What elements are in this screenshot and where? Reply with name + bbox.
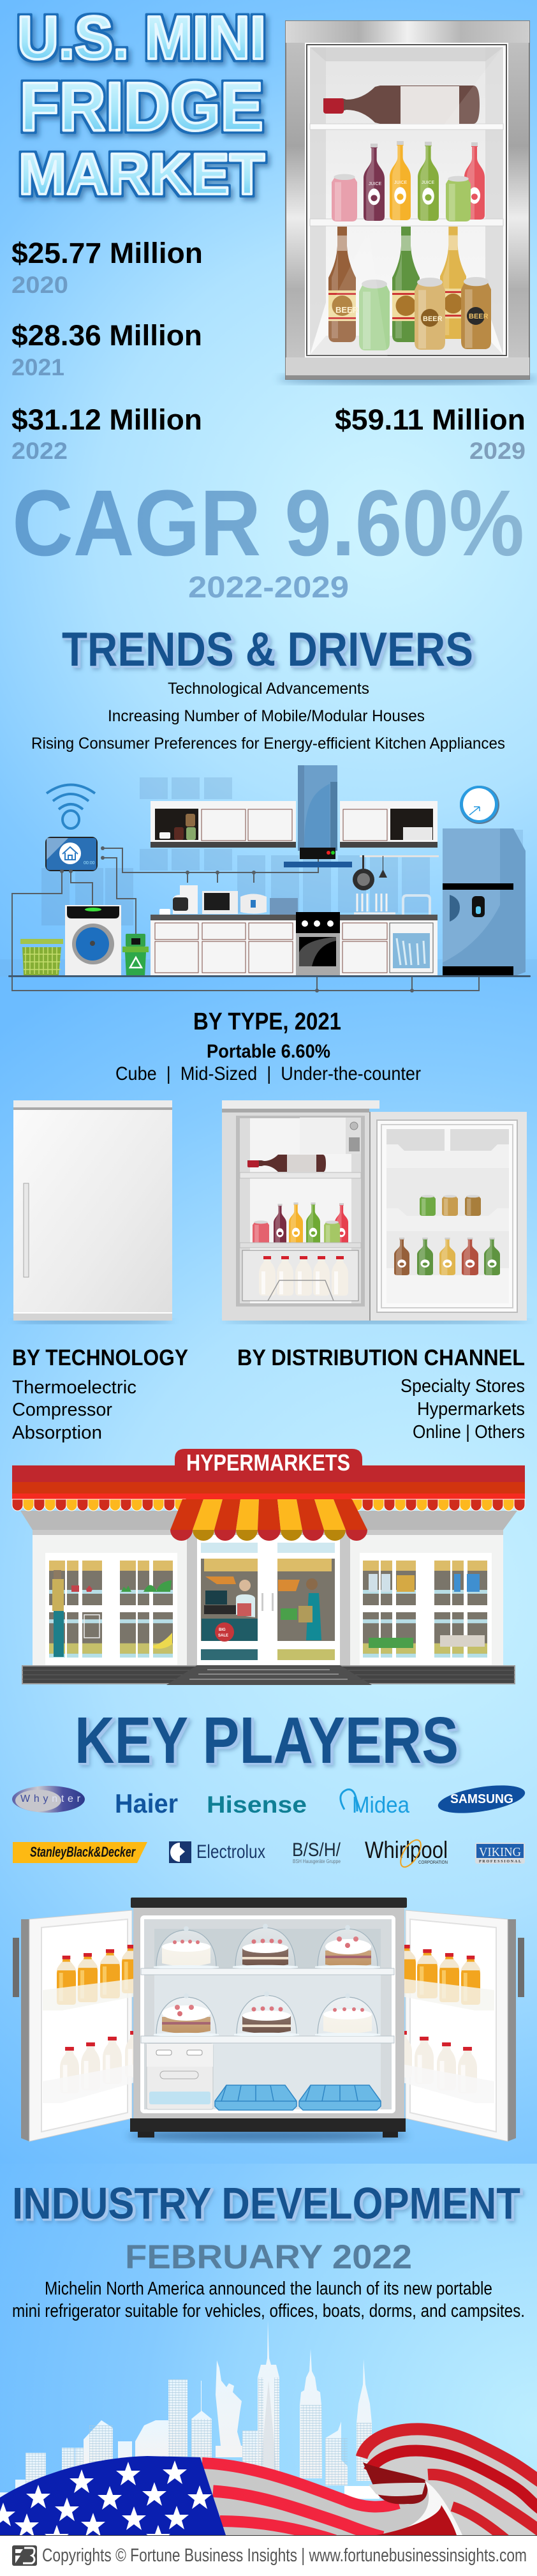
icon: smart home hub — [45, 837, 98, 871]
logo: Electrolux: Electrolux — [196, 1841, 265, 1862]
cashier counter: SALE — [218, 1634, 228, 1638]
oven — [296, 912, 340, 977]
by distribution channel: Online | Others — [413, 1422, 525, 1442]
awning and sign — [12, 1449, 525, 1541]
upper cabinets right — [340, 801, 438, 848]
icon: smart home hub: 00:00 — [84, 861, 95, 865]
wine bottle — [323, 86, 480, 124]
chrysler building — [357, 2359, 372, 2481]
logo: Electrolux — [169, 1841, 265, 1863]
floor — [8, 975, 531, 977]
by distribution channel — [237, 1345, 525, 1442]
market value 2020: $25.77 Million — [11, 237, 203, 269]
wine bottle — [247, 1155, 326, 1172]
awning scallops — [12, 1499, 525, 1511]
ice trays — [215, 2085, 381, 2110]
market value 2029 — [335, 403, 526, 464]
door handle — [24, 1183, 29, 1277]
development text — [12, 2279, 525, 2321]
left door — [13, 1910, 145, 2141]
title: FRIDGE — [20, 68, 263, 145]
recycling bin — [122, 934, 149, 977]
market value 2021: $28.36 Million — [11, 319, 202, 352]
title: MARKET — [18, 142, 265, 207]
by distribution channel: Hypermarkets — [417, 1399, 525, 1419]
blue refrigerator — [443, 828, 526, 977]
store base and steps — [22, 1665, 515, 1685]
beer bottles and cans: BEER — [335, 305, 359, 315]
market value 2020 — [11, 237, 203, 298]
title: U.S. MINI — [17, 4, 266, 72]
by technology: Absorption — [12, 1423, 102, 1443]
trends list: Rising Consumer Preferences for Energy-efficient Kitchen Appliances — [31, 735, 505, 753]
upper cabinets left — [151, 801, 296, 848]
lower cabinets — [151, 915, 438, 977]
logo: Fortune Business Insights — [12, 2545, 37, 2566]
logo: Whirlpool — [365, 1837, 448, 1870]
logo: BSH: BSH Hausgeräte Gruppe — [293, 1859, 341, 1864]
by technology: Compressor — [12, 1400, 112, 1420]
by distribution channel: Specialty Stores — [401, 1376, 525, 1397]
right door — [392, 1910, 524, 2141]
store wall — [20, 1511, 517, 1665]
entrance doors — [187, 1535, 350, 1665]
logo: Viking: PROFESSIONAL — [479, 1860, 521, 1864]
juice bottles and cans: JUICE — [369, 182, 382, 186]
market value 2022: 2022 — [11, 438, 68, 464]
cashier counter — [202, 1580, 258, 1642]
by type heading: BY TYPE, 2021 — [193, 1008, 341, 1035]
logo: Whirlpool: Whirlpool — [365, 1837, 448, 1863]
illustration: American flag — [0, 2424, 537, 2549]
footer — [0, 2535, 537, 2576]
key player logos — [12, 1780, 527, 1870]
cooker hood — [284, 765, 352, 867]
drinks on middle shelf — [253, 1202, 348, 1247]
by technology — [12, 1345, 188, 1443]
open door — [369, 1112, 527, 1321]
juice bottles and cans — [332, 141, 485, 221]
washing machine — [65, 905, 121, 977]
beer bottles and cans — [328, 227, 491, 350]
logo: BSH: B/S/H/ — [292, 1839, 341, 1861]
back ribbon — [358, 2424, 537, 2540]
door cans — [420, 1195, 481, 1216]
market value 2029: 2029 — [469, 438, 526, 464]
illustration: smart kitchen — [0, 765, 537, 992]
fridge cabinet — [130, 1898, 407, 2138]
heading: key players: KEY PLAYERS — [75, 1704, 459, 1777]
logo: Samsung — [436, 1780, 527, 1818]
juice bottles and cans: JUICE — [422, 181, 435, 185]
market value 2021: 2021 — [11, 354, 64, 380]
logo: Stanley Black & Decker: StanleyBlack&Decker — [30, 1844, 136, 1860]
by technology: Thermoelectric — [12, 1377, 136, 1398]
logo: Viking — [475, 1843, 525, 1864]
cakes under domes — [152, 1924, 382, 2037]
counter appliances — [159, 885, 430, 917]
illustration: closed fridge — [13, 1100, 173, 1324]
logo: Samsung: SAMSUNG — [450, 1792, 513, 1806]
pans on rail — [353, 855, 439, 890]
leading segment: Portable 6.60% — [207, 1041, 330, 1062]
logo: Haier: Haier — [115, 1788, 178, 1818]
skyline window detail — [26, 2378, 372, 2497]
illustration: open double door fridge with cakes — [13, 1898, 524, 2142]
heading: trends and drivers: TRENDS & DRIVERS — [62, 622, 473, 676]
empire state building — [300, 2349, 322, 2478]
ice drawer — [147, 2044, 213, 2109]
logo: Whynter: Why nter — [20, 1793, 81, 1804]
illustration: hypermarket store — [12, 1449, 525, 1685]
juice bottles and cans: JUICE — [394, 181, 408, 185]
flag canton — [0, 2456, 226, 2535]
trends list: Technological Advancements — [168, 680, 369, 698]
central awning — [170, 1499, 367, 1541]
market value 2029: $59.11 Million — [335, 403, 526, 436]
title — [17, 4, 266, 207]
logo: Midea: Midea — [352, 1792, 410, 1818]
logo: Whirlpool: CORPORATION — [418, 1861, 448, 1865]
logo: Stanley Black & Decker — [13, 1842, 147, 1863]
by technology: BY TECHNOLOGY — [12, 1345, 188, 1370]
shopper — [281, 1578, 321, 1640]
fold of the flag — [363, 2462, 427, 2504]
freezer compartment — [300, 1118, 361, 1154]
market value 2021 — [11, 319, 202, 380]
market value 2022 — [11, 403, 202, 464]
right window — [360, 1553, 492, 1665]
front ribbon — [200, 2457, 462, 2540]
logo: Viking: VIKING — [479, 1845, 521, 1859]
beer bottles and cans: BEER — [469, 313, 489, 320]
dishwasher — [390, 923, 433, 973]
circuit wires — [12, 846, 481, 992]
market value 2020: 2020 — [11, 272, 68, 298]
logo: Whynter — [12, 1786, 85, 1813]
illustration: glass door mini fridge with drinks — [277, 21, 537, 384]
laundry basket — [20, 939, 63, 977]
store sign text: HYPERMARKETS — [186, 1449, 350, 1476]
beer bottles and cans: BEER — [423, 315, 443, 323]
cashier counter: BIG — [219, 1628, 226, 1632]
development date: FEBRUARY 2022 — [125, 2238, 412, 2276]
market value 2022: $31.12 Million — [11, 403, 202, 436]
statue of liberty — [216, 2360, 247, 2457]
trends list — [31, 680, 505, 753]
illustration: open fridge — [222, 1100, 529, 1324]
door bottles — [394, 1238, 500, 1275]
type segments: Cube | Mid-Sized | Under-the-counter — [115, 1063, 421, 1084]
illustration: New York skyline — [0, 2320, 382, 2518]
icon: wall clock — [460, 786, 499, 824]
trends list: Increasing Number of Mobile/Modular Houses — [108, 707, 425, 725]
crisper with milk bottles — [242, 1250, 358, 1301]
icon: wifi signal — [47, 785, 95, 828]
logo: Hisense: Hisense — [207, 1792, 307, 1818]
left window — [45, 1553, 177, 1665]
one world trade center — [258, 2320, 279, 2471]
stars — [0, 2460, 212, 2535]
CAGR period: 2022-2029 — [188, 570, 349, 604]
